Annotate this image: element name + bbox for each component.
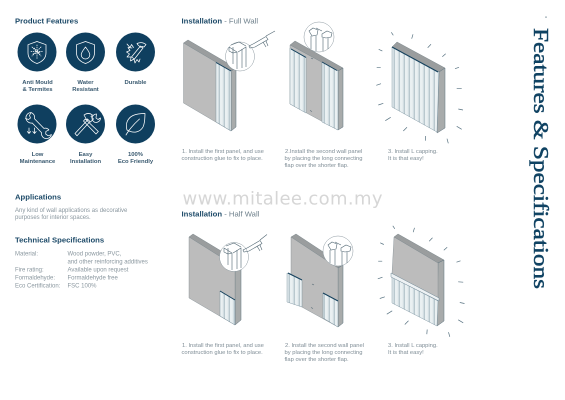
- heading: applications: Applications: [15, 192, 61, 201]
- text: specification table: Eco Certification:: [15, 283, 61, 289]
- text: applications description: Any kind of wall applications as decorative: [15, 208, 127, 214]
- text: specification table: Formaldehyde free: [68, 275, 119, 281]
- text: specification table: Formaldehyde:: [15, 275, 55, 281]
- illustration: full wall step 1: [184, 31, 275, 131]
- caption: full wall step 2: flap over the shorter flap.: [284, 163, 349, 169]
- illustration: full wall step 3: [376, 32, 463, 143]
- icon: easy installation: [66, 104, 105, 144]
- icon: durable: [116, 32, 155, 72]
- label: eco friendly: Eco Friendly: [118, 159, 154, 165]
- illustration: half wall step 3: [378, 226, 464, 337]
- text: specification table: Wood powder, PVC,: [68, 252, 122, 258]
- text: specification table: [15, 252, 148, 289]
- label: low maintenance: Low: [32, 152, 43, 158]
- label: anti mould: & Termites: [22, 87, 53, 93]
- watermark: www.mitalee.com.my: [182, 188, 383, 210]
- text: applications description: purposes for interior spaces.: [15, 215, 91, 221]
- caption: full wall step 2: 2.Install the second wall panel: [285, 149, 362, 155]
- text: specification table: Available upon request: [68, 268, 129, 274]
- caption: full wall step 1: construction glue to fix to place.: [182, 156, 263, 162]
- icon: anti mould and termites: [18, 32, 56, 72]
- label: easy installation: Installation: [70, 159, 101, 165]
- icon: low maintenance: [18, 104, 56, 144]
- caption: half wall step 2: 2. Install the second wall panel: [285, 343, 364, 349]
- caption: half wall step 1: 1. Install the first panel, and use: [182, 343, 264, 349]
- decorative mark: ": [545, 17, 547, 23]
- caption: half wall step 3: 3. Install L capping.: [388, 343, 438, 349]
- label: water resistant: Resistant: [72, 87, 99, 93]
- heading: installation full wall: Installation - Full Wall: [182, 16, 258, 26]
- text: specification table: Material:: [15, 252, 38, 258]
- caption: full wall step 3: 3. Install L capping.: [388, 149, 438, 155]
- label: anti mould: Anti Mould: [22, 80, 53, 86]
- caption: half wall step 3: It is that easy!: [388, 350, 424, 356]
- text: specification table: and other reinforcing additives: [68, 260, 148, 266]
- label: water resistant: Water: [77, 80, 94, 86]
- arrows: radiating ticks: [378, 226, 464, 337]
- label: low maintenance: Maintenance: [20, 159, 56, 165]
- text: specification table: FSC 100%: [68, 283, 97, 289]
- caption: full wall step 3: It is that easy!: [388, 156, 424, 162]
- text: specification table: Fire rating:: [15, 268, 44, 274]
- caption: half wall step 1: construction glue to fix to place.: [182, 350, 263, 356]
- label: durable: Durable: [125, 80, 147, 86]
- heading: technical specifications: Technical Specifications: [15, 236, 104, 244]
- caption: half wall step 2: flap over the shorter flap.: [284, 357, 349, 363]
- arrows: radiating ticks: [376, 32, 463, 143]
- caption: full wall step 2: by placing the long connecting: [284, 156, 362, 162]
- caption: half wall step 2: by placing the long connecting: [284, 350, 362, 356]
- page title: features and specifications: Features & Specifications: [529, 28, 553, 289]
- label: eco friendly: 100%: [128, 152, 143, 158]
- icon: water resistant: [66, 32, 105, 72]
- illustration: full wall step 2: [290, 22, 343, 130]
- heading: installation half wall: Installation - Half Wall: [182, 210, 260, 218]
- caption: full wall step 1: 1. Install the first panel, and use: [182, 149, 264, 155]
- icon: eco friendly: [116, 104, 155, 144]
- illustration: half wall step 1: [189, 234, 267, 325]
- label: easy installation: Easy: [79, 152, 92, 158]
- heading: product features: Product Features: [15, 16, 78, 26]
- illustration: half wall step 2: [287, 234, 353, 327]
